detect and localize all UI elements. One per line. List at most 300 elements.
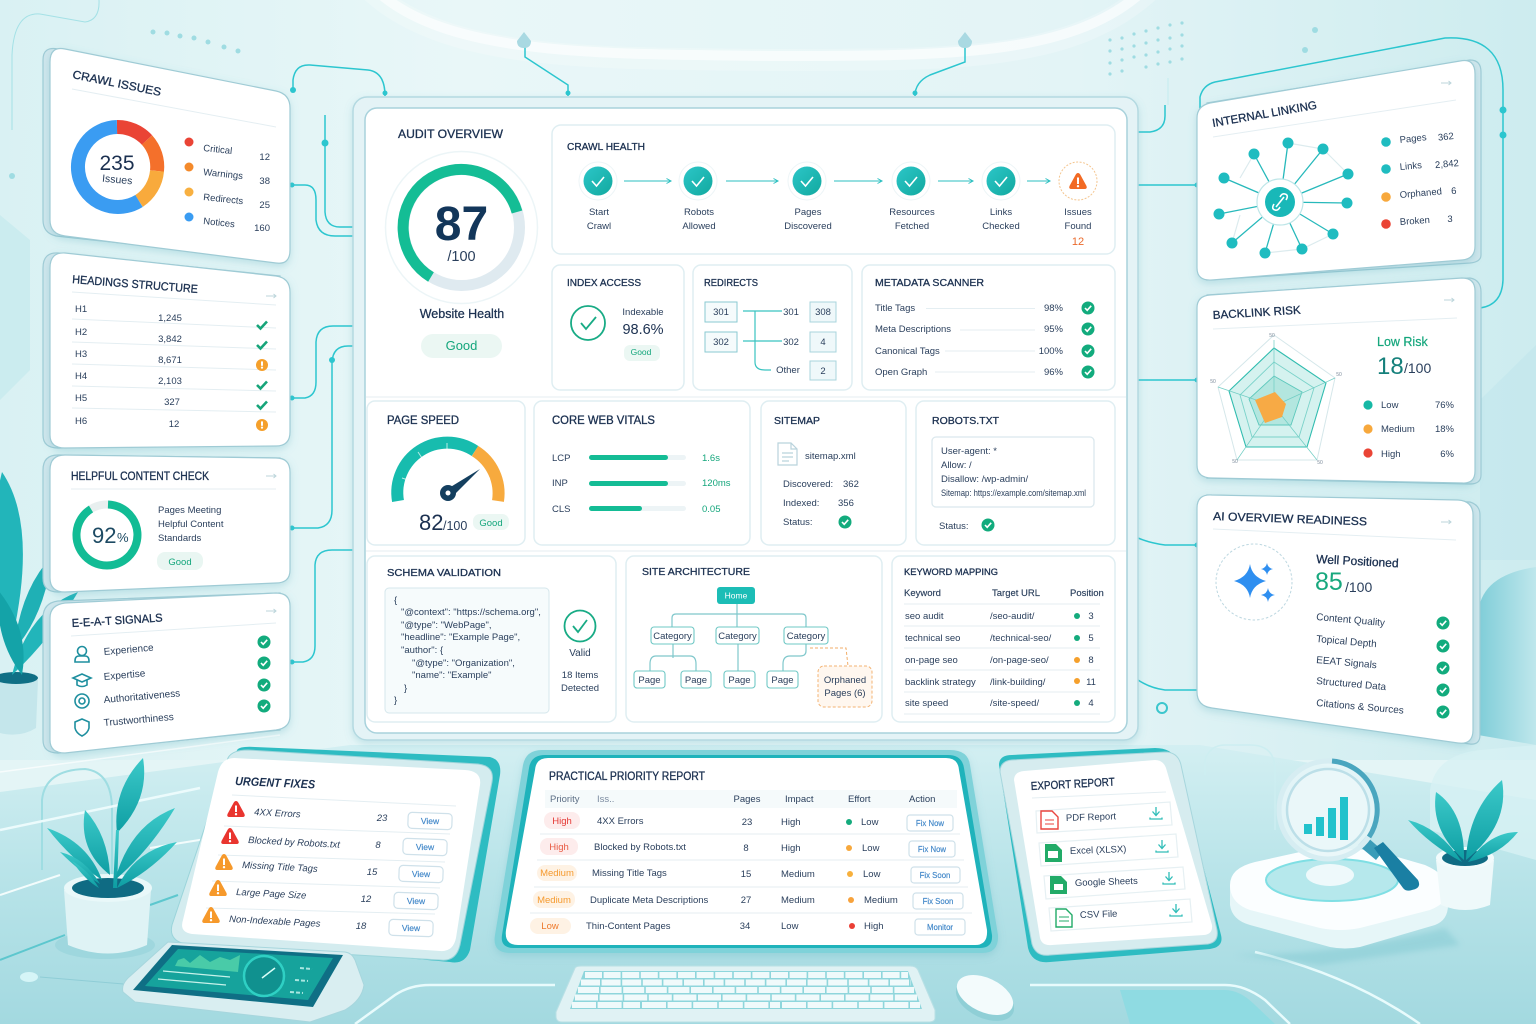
- badge: good: Good: [446, 338, 477, 353]
- table: heading counts: H5: [75, 393, 87, 404]
- heading: redirects: REDIRECTS: [704, 277, 758, 289]
- table: priority report: Low: [861, 817, 879, 828]
- list: ai readiness checks: Topical Depth: [1316, 634, 1377, 650]
- table: priority report: Fix Soon: [923, 897, 953, 906]
- diagram: redirect map: 302: [783, 337, 799, 348]
- flow: crawl steps: Start: [589, 207, 609, 218]
- table: priority report: Low: [541, 921, 559, 932]
- code: robots file: Disallow: /wp-admin/: [941, 474, 1028, 485]
- table: priority report: Fix Now: [916, 819, 944, 828]
- stat: page speed score: 82: [419, 510, 443, 535]
- stat: indexable rate: Good: [631, 347, 652, 357]
- table: priority report: Impact: [785, 794, 814, 805]
- list: export options: [1036, 802, 1192, 931]
- code: schema json: "author": {: [401, 645, 443, 656]
- table: priority report: Fix Soon: [920, 871, 950, 880]
- legend: issue counts: Redirects: [203, 192, 244, 207]
- list: metadata coverage: [875, 302, 1094, 378]
- panel: audit overview: [386, 129, 538, 358]
- panel: e-e-a-t signals: [43, 593, 290, 753]
- table: keyword map: 8: [1088, 655, 1094, 666]
- code: schema json: "@type": "WebPage",: [401, 620, 492, 631]
- legend: link stats: Pages: [1399, 132, 1427, 146]
- table: priority report: Action: [909, 794, 935, 805]
- table: heading counts: H3: [75, 349, 87, 360]
- chart: vitals bars: LCP: [552, 453, 570, 464]
- heading: site architecture: SITE ARCHITECTURE: [642, 566, 750, 578]
- diagram: redirect map: 301: [783, 307, 799, 318]
- table: keyword map: 5: [1088, 633, 1094, 644]
- stats: sitemap counts: Indexed:: [783, 498, 819, 509]
- heading: robots.txt: ROBOTS.TXT: [932, 415, 1000, 427]
- chart: risk radar: 50: [1269, 333, 1275, 339]
- device: urgent fixes tablet: [171, 747, 500, 962]
- heading: urgent fixes: URGENT FIXES: [235, 774, 315, 791]
- legend: link stats: Orphaned: [1399, 186, 1442, 201]
- text: helpful content description: Pages Meeting: [158, 505, 221, 516]
- table: keyword map: /seo-audit/: [990, 611, 1035, 622]
- list: urgent fix rows: 18: [356, 921, 367, 932]
- table: heading counts: H6: [75, 416, 87, 427]
- status: robots ok: [939, 518, 994, 532]
- chart: link graph: [1214, 138, 1354, 258]
- table: heading counts: 8,671: [158, 355, 182, 366]
- diagram: site tree: Page: [728, 675, 751, 686]
- table: priority report: 34: [740, 921, 750, 932]
- code: schema json: }: [404, 683, 407, 694]
- heading: backlink risk: BACKLINK RISK: [1212, 305, 1301, 322]
- list: urgent fix rows: View: [416, 842, 435, 852]
- table: keyword map: seo audit: [905, 611, 944, 622]
- table: priority report: Duplicate Meta Descriptions: [590, 895, 709, 906]
- badge: good: [421, 334, 502, 358]
- table: keyword map: Target URL: [992, 588, 1040, 599]
- list: urgent fix rows: 12: [361, 894, 372, 905]
- chart: 92 percent ring: 92: [92, 523, 116, 548]
- plant: right floor plant: [1408, 780, 1518, 910]
- main dashboard frame: [353, 97, 1138, 740]
- stats: sitemap counts: sitemap.xml: [805, 451, 856, 462]
- heading: metadata scanner: METADATA SCANNER: [875, 277, 984, 289]
- chart: vitals bars: 120ms: [702, 478, 731, 489]
- list: export options: Excel (XLSX): [1070, 844, 1127, 857]
- code: robots file: Allow: /: [941, 460, 972, 471]
- table: keyword map: 11: [1086, 677, 1096, 688]
- chart: risk radar: 50: [1317, 460, 1323, 466]
- diagram: redirect map: 2: [820, 366, 826, 377]
- table: heading counts: H1: [75, 304, 87, 315]
- table: priority report: [530, 790, 972, 935]
- list: metadata coverage: Canonical Tags: [875, 346, 940, 357]
- panel: crawl health: [552, 125, 1115, 254]
- stat: page speed score: /100: [443, 519, 467, 533]
- list: export options: CSV File: [1080, 909, 1118, 921]
- stat: indexable rate: [622, 307, 664, 361]
- top swoosh: [372, 0, 1148, 60]
- panel: ai overview readiness: [1197, 495, 1480, 744]
- panel: site architecture: [626, 556, 882, 722]
- table: keyword map: 4: [1088, 698, 1094, 709]
- legend: issue counts: Warnings: [203, 167, 244, 182]
- chart: speedometer: [397, 443, 499, 501]
- list: metadata coverage: 100%: [1039, 346, 1064, 357]
- flow: crawl steps: 12: [1072, 236, 1084, 248]
- list: e-e-a-t signals: Trustworthiness: [103, 712, 174, 729]
- table: priority report: Medium: [781, 869, 815, 880]
- heading: index access: INDEX ACCESS: [567, 277, 641, 289]
- code: schema json: {: [394, 595, 397, 606]
- table: priority report: Blocked by Robots.txt: [594, 842, 686, 853]
- diagram: site tree: Category: [787, 631, 826, 642]
- code: schema json: "@type": "Organization",: [412, 658, 515, 669]
- icon: google sheets: [1050, 876, 1067, 894]
- table: priority report: 4XX Errors: [597, 816, 644, 827]
- table: keyword map: /site-speed/: [990, 698, 1039, 709]
- stat: ai readiness score: [1315, 552, 1399, 596]
- chart: risk radar: [1210, 333, 1342, 466]
- text: helpful content description: Helpful Content: [158, 519, 224, 530]
- table: priority report: Medium: [540, 868, 574, 879]
- stat: backlink risk score: [1377, 335, 1431, 380]
- code: schema json: "@context": "https://schema.org",: [401, 607, 541, 618]
- connector nodes: [9, 87, 1506, 664]
- list: urgent fix rows: View: [407, 896, 426, 906]
- table: priority report: High: [549, 842, 569, 853]
- table: keyword map: site speed: [905, 698, 948, 709]
- panel: sitemap: [761, 401, 906, 545]
- legend: risk levels: 6%: [1440, 449, 1455, 460]
- magnifier on pedestal: [1230, 761, 1460, 965]
- heading: sitemap: SITEMAP: [774, 415, 820, 427]
- stats: sitemap counts: 362: [843, 479, 859, 490]
- legend: link stats: Broken: [1399, 215, 1430, 228]
- text: helpful content description: [158, 505, 224, 544]
- diagram: redirect map: 301: [713, 307, 729, 318]
- icon: excel: [1045, 844, 1062, 862]
- table: keyword map: technical seo: [905, 633, 960, 644]
- flow: crawl steps: Discovered: [784, 221, 832, 232]
- heading: audit overview: AUDIT OVERVIEW: [398, 129, 503, 141]
- chart: vitals bars: CLS: [552, 504, 570, 515]
- chart: vitals bars: 1.6s: [702, 453, 720, 464]
- list: metadata coverage: Meta Descriptions: [875, 324, 951, 335]
- legend: risk levels: Medium: [1381, 424, 1415, 435]
- stat: ai readiness score: /100: [1345, 579, 1372, 595]
- table: priority report: 27: [741, 895, 751, 906]
- stat: backlink risk score: 18: [1377, 353, 1404, 380]
- list: urgent fix rows: Non-Indexable Pages: [229, 914, 321, 930]
- status: robots ok: Status:: [939, 521, 969, 532]
- heading: page speed: PAGE SPEED: [387, 415, 459, 427]
- flow: crawl steps: Pages: [795, 207, 822, 218]
- mouse: [949, 967, 1021, 1024]
- list: urgent fix rows: 23: [376, 813, 388, 824]
- diagram: redirect map: 302: [713, 337, 729, 348]
- heading: e-e-a-t signals: E-E-A-T SIGNALS: [71, 612, 163, 630]
- table: keyword map: 3: [1088, 611, 1094, 622]
- panel: metadata scanner: [862, 265, 1115, 390]
- table: priority report: 15: [741, 869, 751, 880]
- panel: schema validation: [367, 556, 616, 722]
- panel: index access: [552, 265, 684, 390]
- table: priority report: Fix Now: [918, 845, 946, 854]
- panel: internal linking: [1197, 60, 1481, 280]
- table: keyword map: on-page seo: [905, 655, 958, 666]
- list: urgent fix rows: View: [421, 816, 440, 826]
- legend: link stats: [1381, 131, 1459, 229]
- list: e-e-a-t signals: Expertise: [103, 668, 146, 683]
- legend: link stats: 6: [1451, 186, 1457, 197]
- list: urgent fix rows: View: [412, 869, 431, 879]
- table: priority report: High: [781, 817, 801, 828]
- dot grid decoration: [150, 21, 1318, 76]
- icon: indexable check: [571, 306, 605, 340]
- top connector pins: [517, 32, 972, 48]
- table: priority report: Low: [781, 921, 799, 932]
- flow: crawl steps: Crawl: [587, 221, 611, 232]
- diagram: site tree: Category: [718, 631, 757, 642]
- list: e-e-a-t signals: Experience: [103, 643, 155, 658]
- list: urgent fix rows: 15: [367, 867, 378, 878]
- legend: risk levels: 76%: [1435, 400, 1455, 411]
- list: urgent fix rows: [202, 801, 452, 937]
- table: priority report: High: [781, 843, 801, 854]
- table: heading counts: 327: [164, 397, 180, 408]
- list: e-e-a-t signals: [103, 636, 270, 729]
- flow: crawl steps: [579, 162, 1097, 248]
- left plant behind cards: [0, 472, 78, 735]
- legend: issue counts: [184, 138, 270, 234]
- table: priority report: 8: [743, 843, 749, 854]
- flow: crawl steps: Allowed: [682, 221, 716, 232]
- diagram: site tree: Home: [725, 590, 748, 600]
- table: heading counts: 3,842: [158, 334, 182, 345]
- list: ai readiness checks: Content Quality: [1316, 612, 1385, 629]
- code: schema json: "name": "Example": [412, 670, 492, 681]
- chart: issues donut: 235: [99, 152, 135, 175]
- diagram: site tree: Page: [771, 675, 794, 686]
- panel: robots.txt: [916, 401, 1115, 545]
- list: ai readiness checks: EEAT Signals: [1316, 655, 1377, 671]
- flow: crawl steps: Found: [1065, 221, 1091, 232]
- list: urgent fix rows: View: [402, 923, 421, 933]
- table: keyword map: Position: [1070, 588, 1104, 599]
- panel: crawl issues: [43, 48, 290, 263]
- status: schema valid: 18 Items: [562, 670, 598, 681]
- table: priority report: Priority: [550, 794, 580, 805]
- stat: indexable rate: Indexable: [622, 307, 664, 318]
- table: keyword map: /link-building/: [990, 677, 1046, 688]
- background glass shapes: [0, 215, 1536, 960]
- code: schema json: [385, 588, 549, 713]
- device: export report tablet: [999, 748, 1222, 962]
- circuit connector lines: [12, 0, 1503, 690]
- legend: risk levels: [1363, 400, 1455, 460]
- stat: indexable rate: 98.6%: [622, 322, 664, 338]
- table: priority report: High: [864, 921, 884, 932]
- code: robots file: User-agent: *: [941, 446, 997, 457]
- flow: crawl steps: Robots: [684, 207, 714, 218]
- chart: health score gauge: /100: [447, 249, 476, 265]
- chart: 92 percent ring: %: [117, 530, 129, 545]
- code: schema json: }: [394, 695, 397, 706]
- table: priority report: Monitor: [927, 923, 953, 932]
- background floor: [0, 745, 1536, 1024]
- chart: issues donut: Issues: [102, 173, 133, 187]
- heading: crawl issues: CRAWL ISSUES: [71, 69, 162, 99]
- list: ai readiness checks: [1316, 612, 1450, 718]
- legend: risk levels: Low: [1381, 400, 1399, 411]
- legend: issue counts: Notices: [203, 216, 236, 230]
- icon: sitemap file: [778, 443, 797, 465]
- diagram: site tree: Page: [685, 675, 707, 686]
- table: priority report: Effort: [848, 794, 871, 805]
- stats: sitemap counts: Status:: [783, 517, 813, 528]
- list: metadata coverage: Open Graph: [875, 367, 927, 378]
- list: metadata coverage: 98%: [1044, 303, 1064, 314]
- list: urgent fix rows: Large Page Size: [236, 887, 307, 902]
- chart: vitals bars: 0.05: [702, 504, 720, 515]
- diagram: redirect map: 4: [820, 337, 826, 348]
- heading: ai overview readiness: AI OVERVIEW READINESS: [1213, 511, 1368, 528]
- table: heading counts: H4: [75, 371, 87, 382]
- list: e-e-a-t signals: Authoritativeness: [103, 688, 181, 706]
- chart: health score gauge: [386, 152, 538, 304]
- status: schema valid: Valid: [569, 648, 591, 659]
- device: small dashboard tablet: [123, 942, 364, 1022]
- heading: core web vitals: CORE WEB VITALS: [552, 415, 655, 427]
- icon: pdf: [1041, 811, 1058, 829]
- legend: link stats: 2,842: [1435, 158, 1459, 171]
- code: schema json: "headline": "Example Page",: [401, 632, 520, 643]
- panel: redirects: [693, 265, 852, 390]
- table: priority report: Low: [863, 869, 881, 880]
- legend: issue counts: 38: [259, 176, 270, 187]
- heading: internal linking: INTERNAL LINKING: [1211, 100, 1318, 130]
- list: export options: PDF Report: [1066, 811, 1117, 824]
- stats: sitemap counts: 356: [838, 498, 854, 509]
- diagram: site tree: Pages (6): [824, 688, 866, 699]
- stat: page speed score: [419, 510, 509, 535]
- panel: page speed: [367, 401, 525, 545]
- legend: link stats: Links: [1399, 160, 1423, 173]
- legend: link stats: 362: [1437, 131, 1454, 144]
- chart: issues donut: [78, 127, 157, 207]
- heading: keyword mapping: KEYWORD MAPPING: [904, 567, 998, 578]
- stat: backlink risk score: Low Risk: [1377, 335, 1428, 349]
- table: priority report: Pages: [734, 794, 761, 805]
- flow: crawl steps: Links: [990, 207, 1012, 218]
- list: urgent fix rows: 4XX Errors: [254, 807, 301, 820]
- heading: export report: EXPORT REPORT: [1031, 777, 1115, 793]
- floor glowing lines: [20, 703, 1420, 1024]
- chart: 92 percent ring: [76, 504, 138, 566]
- code: robots file: [932, 437, 1094, 507]
- table: priority report: Medium: [864, 895, 898, 906]
- list: metadata coverage: 95%: [1044, 324, 1064, 335]
- heading: practical priority report: PRACTICAL PRIORITY REPORT: [549, 771, 705, 783]
- heading: crawl health: CRAWL HEALTH: [567, 141, 645, 153]
- legend: risk levels: High: [1381, 449, 1401, 460]
- heading: helpful content check: HELPFUL CONTENT CHECK: [71, 471, 209, 483]
- device: practical priority report: [495, 750, 998, 953]
- label: website health: Website Health: [420, 307, 504, 321]
- background wall: [0, 0, 1536, 760]
- panel: helpful content check: [43, 455, 290, 592]
- list: export options: Google Sheets: [1075, 876, 1138, 889]
- plant: left floor plant: [47, 758, 177, 959]
- diagram: site tree: Category: [653, 631, 692, 642]
- list: ai readiness checks: Citations & Sources: [1316, 698, 1404, 717]
- table: priority report: Iss..: [597, 794, 614, 805]
- table: heading counts: 1,245: [158, 313, 182, 324]
- text: helpful content description: Standards: [158, 533, 202, 544]
- legend: issue counts: 25: [259, 200, 270, 211]
- diagram: site tree: Page: [638, 675, 661, 686]
- icons: e-e-a-t signals: [73, 646, 91, 736]
- status: schema valid: [561, 610, 599, 694]
- keyboard: [556, 966, 935, 1022]
- table: heading counts: 2,103: [158, 376, 182, 387]
- diagram: redirect map: Other: [776, 365, 800, 376]
- chart: risk radar: 50: [1232, 459, 1238, 465]
- stats: sitemap counts: Discovered:: [783, 479, 833, 490]
- legend: issue counts: Critical: [203, 143, 233, 157]
- legend: issue counts: 160: [254, 223, 270, 234]
- panel: backlink risk: [1197, 278, 1481, 484]
- table: priority report: 23: [742, 817, 752, 828]
- flow: crawl steps: Issues: [1064, 207, 1092, 218]
- flow: crawl steps: Resources: [889, 207, 935, 218]
- chart: vitals bars: INP: [552, 478, 568, 489]
- table: keyword map: Keyword: [904, 588, 941, 599]
- table: priority report: Low: [862, 843, 880, 854]
- legend: link stats: 3: [1447, 214, 1453, 225]
- table: priority report: Medium: [781, 895, 815, 906]
- flow: crawl steps: Checked: [982, 221, 1020, 232]
- legend: issue counts: 12: [259, 152, 270, 163]
- table: heading counts: 12: [169, 419, 179, 430]
- panel: headings structure: [43, 253, 290, 448]
- table: priority report: Medium: [537, 895, 571, 906]
- table: keyword map: /technical-seo/: [990, 633, 1052, 644]
- panel: core web vitals: [534, 401, 750, 545]
- status: schema valid: Detected: [561, 683, 599, 694]
- panel: keyword mapping: [892, 556, 1115, 722]
- icon: ai sparkle: [1216, 544, 1292, 620]
- table: priority report: Thin-Content Pages: [586, 921, 671, 932]
- table: keyword map: [904, 588, 1104, 714]
- heading: headings structure: HEADINGS STRUCTURE: [72, 274, 199, 296]
- list: urgent fix rows: Missing Title Tags: [242, 860, 318, 875]
- table: heading counts: [72, 304, 276, 431]
- stat: backlink risk score: /100: [1404, 360, 1431, 376]
- stat: ai readiness score: Well Positioned: [1316, 552, 1399, 570]
- table: keyword map: /on-page-seo/: [990, 655, 1049, 666]
- stat: ai readiness score: 85: [1315, 568, 1343, 596]
- badge: good: [157, 552, 203, 570]
- list: urgent fix rows: 8: [375, 840, 381, 851]
- list: ai readiness checks: Structured Data: [1316, 676, 1387, 693]
- stat: page speed score: Good: [479, 518, 503, 529]
- table: heading counts: H2: [75, 327, 87, 338]
- code: robots file: Sitemap: https://example.com/sitemap.xml: [941, 488, 1086, 499]
- table: priority report: High: [552, 816, 572, 827]
- legend: risk levels: 18%: [1435, 424, 1455, 435]
- diagram: site tree: [634, 587, 872, 707]
- chart: risk radar: 50: [1210, 379, 1216, 385]
- diagram: redirect map: 308: [815, 307, 831, 318]
